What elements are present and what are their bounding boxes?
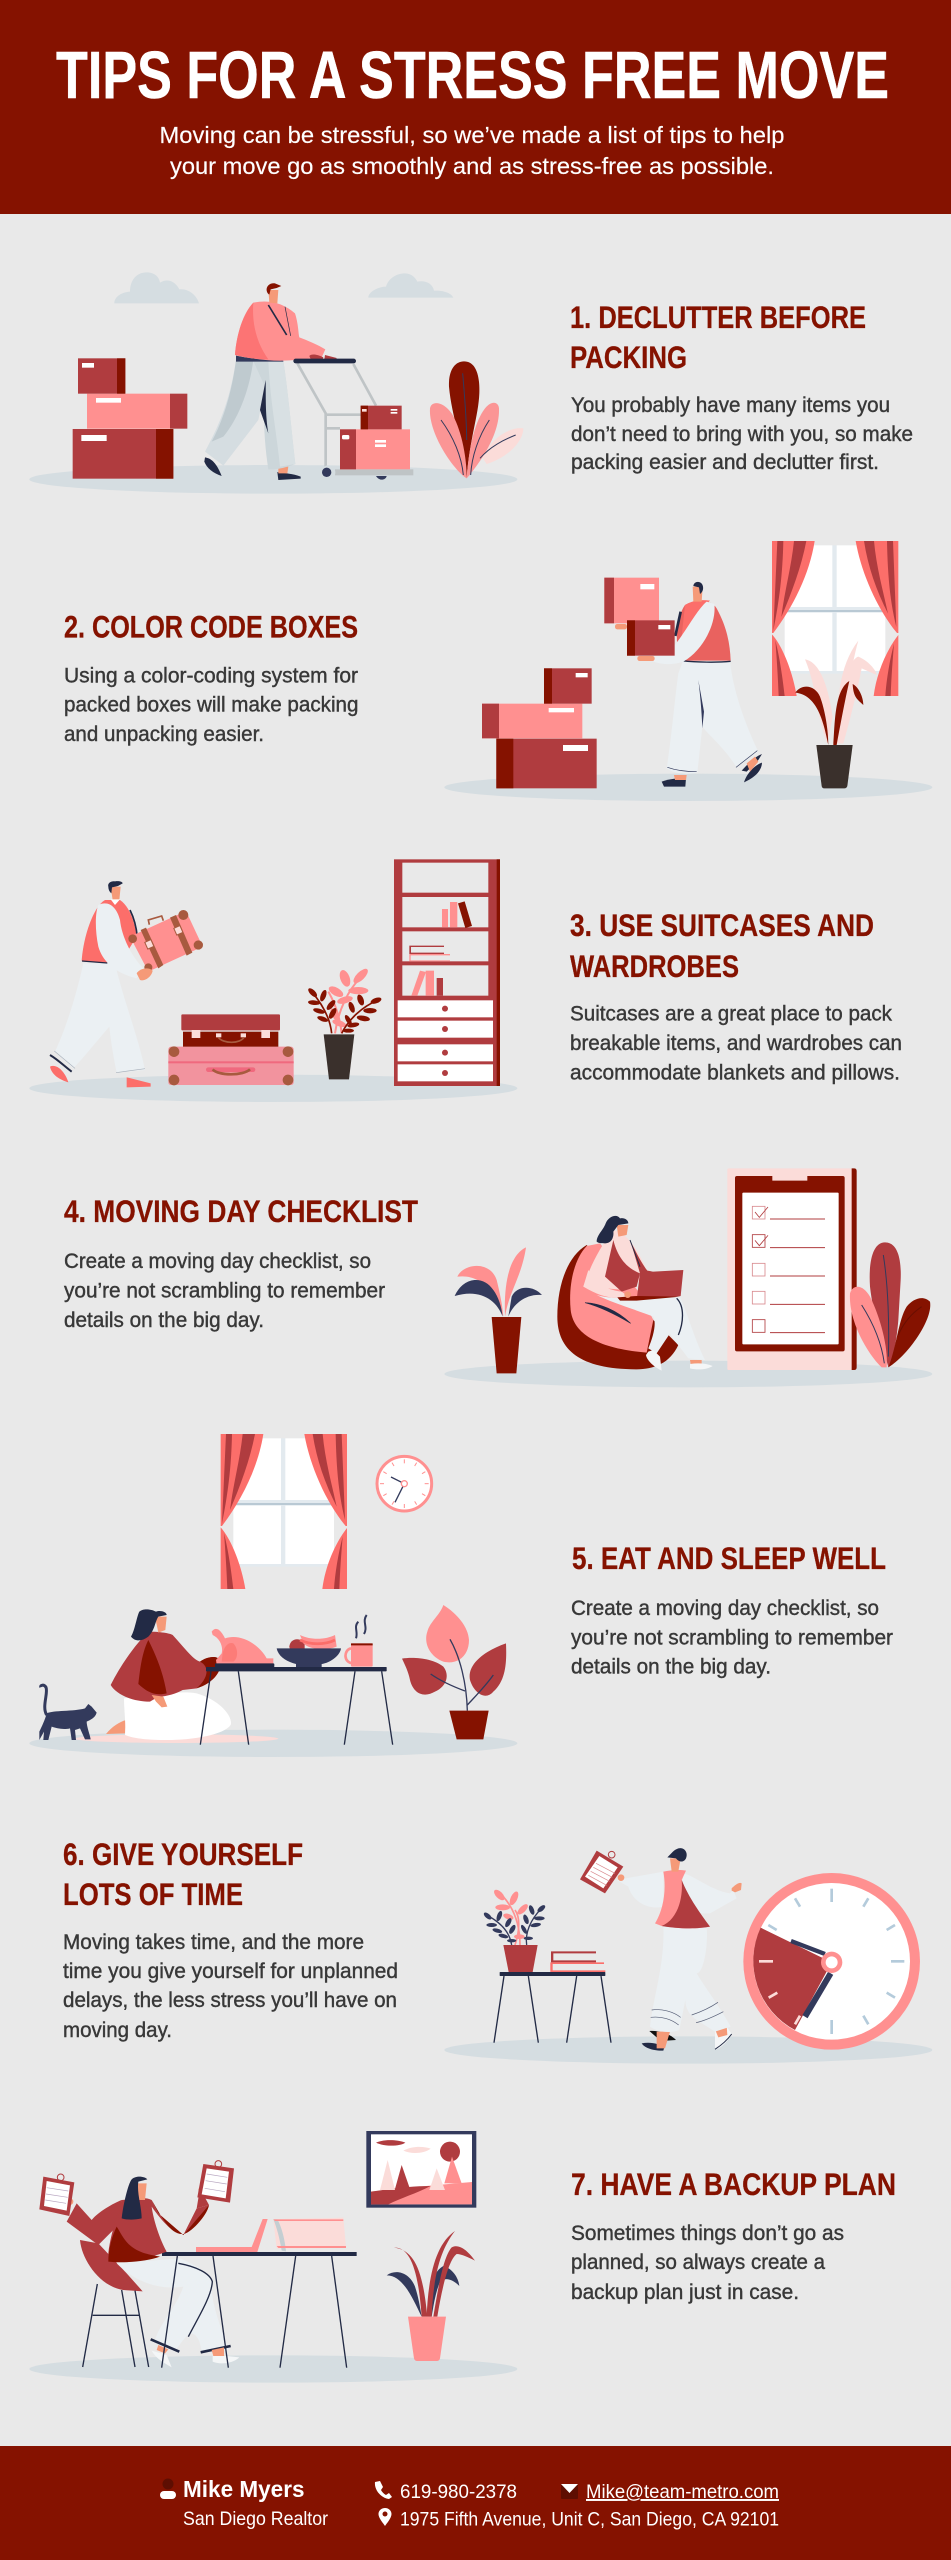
tip 4 heading: 4. MOVING DAY CHECKLIST <box>64 1193 418 1229</box>
man carrying boxes <box>604 578 762 787</box>
icon: plant <box>430 361 523 478</box>
tip 1 body: You probably have many items you <box>571 394 890 417</box>
man with suitcase <box>50 881 203 1087</box>
tip 4 body: details on the big day. <box>64 1309 264 1332</box>
icon: checklist phone <box>727 1168 857 1370</box>
tip 7 body: planned, so always create a <box>571 2251 825 2274</box>
floor shadow <box>29 1730 517 1757</box>
icon: large clock <box>743 1873 920 2050</box>
icon: potted plant <box>455 1247 542 1373</box>
tip 2 text <box>64 608 358 746</box>
tip 1 heading <box>570 299 866 375</box>
tip 3 body: accommodate blankets and pillows. <box>570 1062 900 1084</box>
tip 7 body: backup plan just in case. <box>571 2281 799 2304</box>
rug <box>75 1734 278 1743</box>
tip 2 heading: 2. COLOR CODE BOXES <box>64 608 358 644</box>
tip 6 body: moving day. <box>63 2019 172 2042</box>
tip 3 heading <box>570 907 874 984</box>
tip 1 body: don’t need to bring with you, so make <box>571 423 913 446</box>
tip 6 heading: LOTS OF TIME <box>63 1876 243 1912</box>
icon: framed landscape picture <box>366 2131 476 2208</box>
address: 1975 Fifth Avenue, Unit C, San Diego, CA 92101 <box>400 2508 779 2530</box>
email address: Mike@team-metro.com <box>586 2481 779 2503</box>
icon: potted plant <box>387 2231 475 2361</box>
woman at desk <box>39 2161 347 2368</box>
tip 3 heading: 3. USE SUITCASES AND <box>570 907 874 943</box>
floor shadow <box>444 774 932 801</box>
icon: stacked boxes <box>73 358 187 479</box>
tip 4 body: you’re not scrambling to remember <box>64 1280 385 1302</box>
tip 3 body: Suitcases are a great place to pack <box>570 1002 892 1026</box>
icon: plant <box>850 1242 930 1367</box>
tip 4 body: Create a moving day checklist, so <box>64 1250 371 1273</box>
tip 3 heading: WARDROBES <box>570 948 739 984</box>
woman on beanbag with laptop <box>557 1216 713 1371</box>
icon: phone <box>375 2481 392 2499</box>
tip 4 text <box>64 1193 418 1332</box>
icon: stacked boxes <box>482 668 597 788</box>
illustration: man carrying boxes by a window <box>444 541 932 801</box>
tip 1 heading: 1. DECLUTTER BEFORE <box>570 299 866 335</box>
illustration: woman eating at table with cat <box>29 1434 517 1757</box>
phone number: 619-980-2378 <box>400 2481 517 2503</box>
subtitle: Moving can be stressful, so we’ve made a list of tips to help <box>160 122 784 148</box>
tip 5 body <box>571 1597 893 1678</box>
subtitle: your move go as smoothly and as stress-free as possible. <box>170 153 774 179</box>
icon: cat <box>39 1685 97 1740</box>
icon: potted plant <box>307 967 382 1079</box>
tip 1 heading: PACKING <box>570 339 687 375</box>
tip 1 body <box>571 394 913 474</box>
icon: side table with plant and books <box>483 1888 611 2043</box>
tip 2 body <box>64 664 358 746</box>
floor shadow <box>444 1361 932 1387</box>
floor shadow <box>29 1075 517 1102</box>
icon: table with food <box>200 1615 393 1745</box>
tip 1 body: packing easier and declutter first. <box>571 451 879 474</box>
illustration: woman with clipboard and large clock <box>444 1848 932 2064</box>
tip 6 heading: 6. GIVE YOURSELF <box>63 1836 303 1872</box>
tip 6 body <box>63 1931 398 2042</box>
footer <box>0 2446 951 2560</box>
tip 7 heading: 7. HAVE A BACKUP PLAN <box>571 2166 896 2202</box>
floor shadow <box>29 465 517 494</box>
tip 7 text <box>571 2166 896 2304</box>
tip 6 text <box>63 1836 398 2042</box>
tip 2 body: Using a color-coding system for <box>64 664 358 688</box>
tip 7 body <box>571 2222 844 2304</box>
header banner <box>0 0 951 214</box>
icon: desk <box>162 2218 357 2256</box>
tip 6 body: Moving takes time, and the more <box>63 1931 364 1954</box>
icon: person <box>160 2478 176 2499</box>
floor shadow <box>29 2355 517 2383</box>
tip 4 body <box>64 1250 385 1332</box>
tip 6 body: delays, the less stress you’ll have on <box>63 1989 397 2012</box>
man <box>204 283 337 480</box>
tip 2 body: and unpacking easier. <box>64 723 264 746</box>
tip 5 heading: 5. EAT AND SLEEP WELL <box>572 1540 886 1576</box>
tip 6 heading <box>63 1836 303 1912</box>
illustration: man pushing cart with boxes <box>29 272 523 494</box>
contact name: Mike Myers <box>183 2476 304 2502</box>
illustration: man carrying suitcase next to shelves <box>29 859 517 1102</box>
tip 3 body <box>570 1002 902 1084</box>
icon: location pin <box>378 2508 392 2526</box>
illustration: woman at desk with clipboards <box>29 2131 517 2383</box>
tip 3 text <box>570 907 902 1084</box>
tip 5 body: Create a moving day checklist, so <box>571 1597 879 1620</box>
tip 6 body: time you give yourself for unplanned <box>63 1960 398 1983</box>
subtitle <box>160 122 784 179</box>
tip 5 text <box>571 1540 893 1678</box>
icon: window with curtains <box>772 541 898 696</box>
contact role: San Diego Realtor <box>183 2508 328 2530</box>
icon: stacked suitcases <box>168 1014 294 1085</box>
icon: potted plant <box>795 641 877 788</box>
icon: clouds <box>114 272 453 303</box>
tip 5 body: details on the big day. <box>571 1656 771 1678</box>
icon: potted plant <box>402 1605 506 1739</box>
woman holding clipboard <box>580 1848 742 2051</box>
icon: hand cart with boxes <box>293 359 413 480</box>
tip 2 body: packed boxes will make packing <box>64 694 358 716</box>
tip 3 body: breakable items, and wardrobes can <box>570 1032 902 1055</box>
icon: wall clock <box>377 1456 432 1511</box>
tip 7 body: Sometimes things don’t go as <box>571 2222 844 2245</box>
woman kneeling <box>106 1609 231 1740</box>
icon: window with curtains <box>221 1434 347 1589</box>
floor shadow <box>444 2036 932 2064</box>
icon: envelope <box>561 2484 578 2499</box>
tip 1 text <box>570 299 913 474</box>
illustration: woman on beanbag with checklist <box>444 1168 932 1387</box>
icon: bookshelf with drawers <box>394 859 500 1086</box>
tip 5 body: you’re not scrambling to remember <box>571 1626 893 1650</box>
